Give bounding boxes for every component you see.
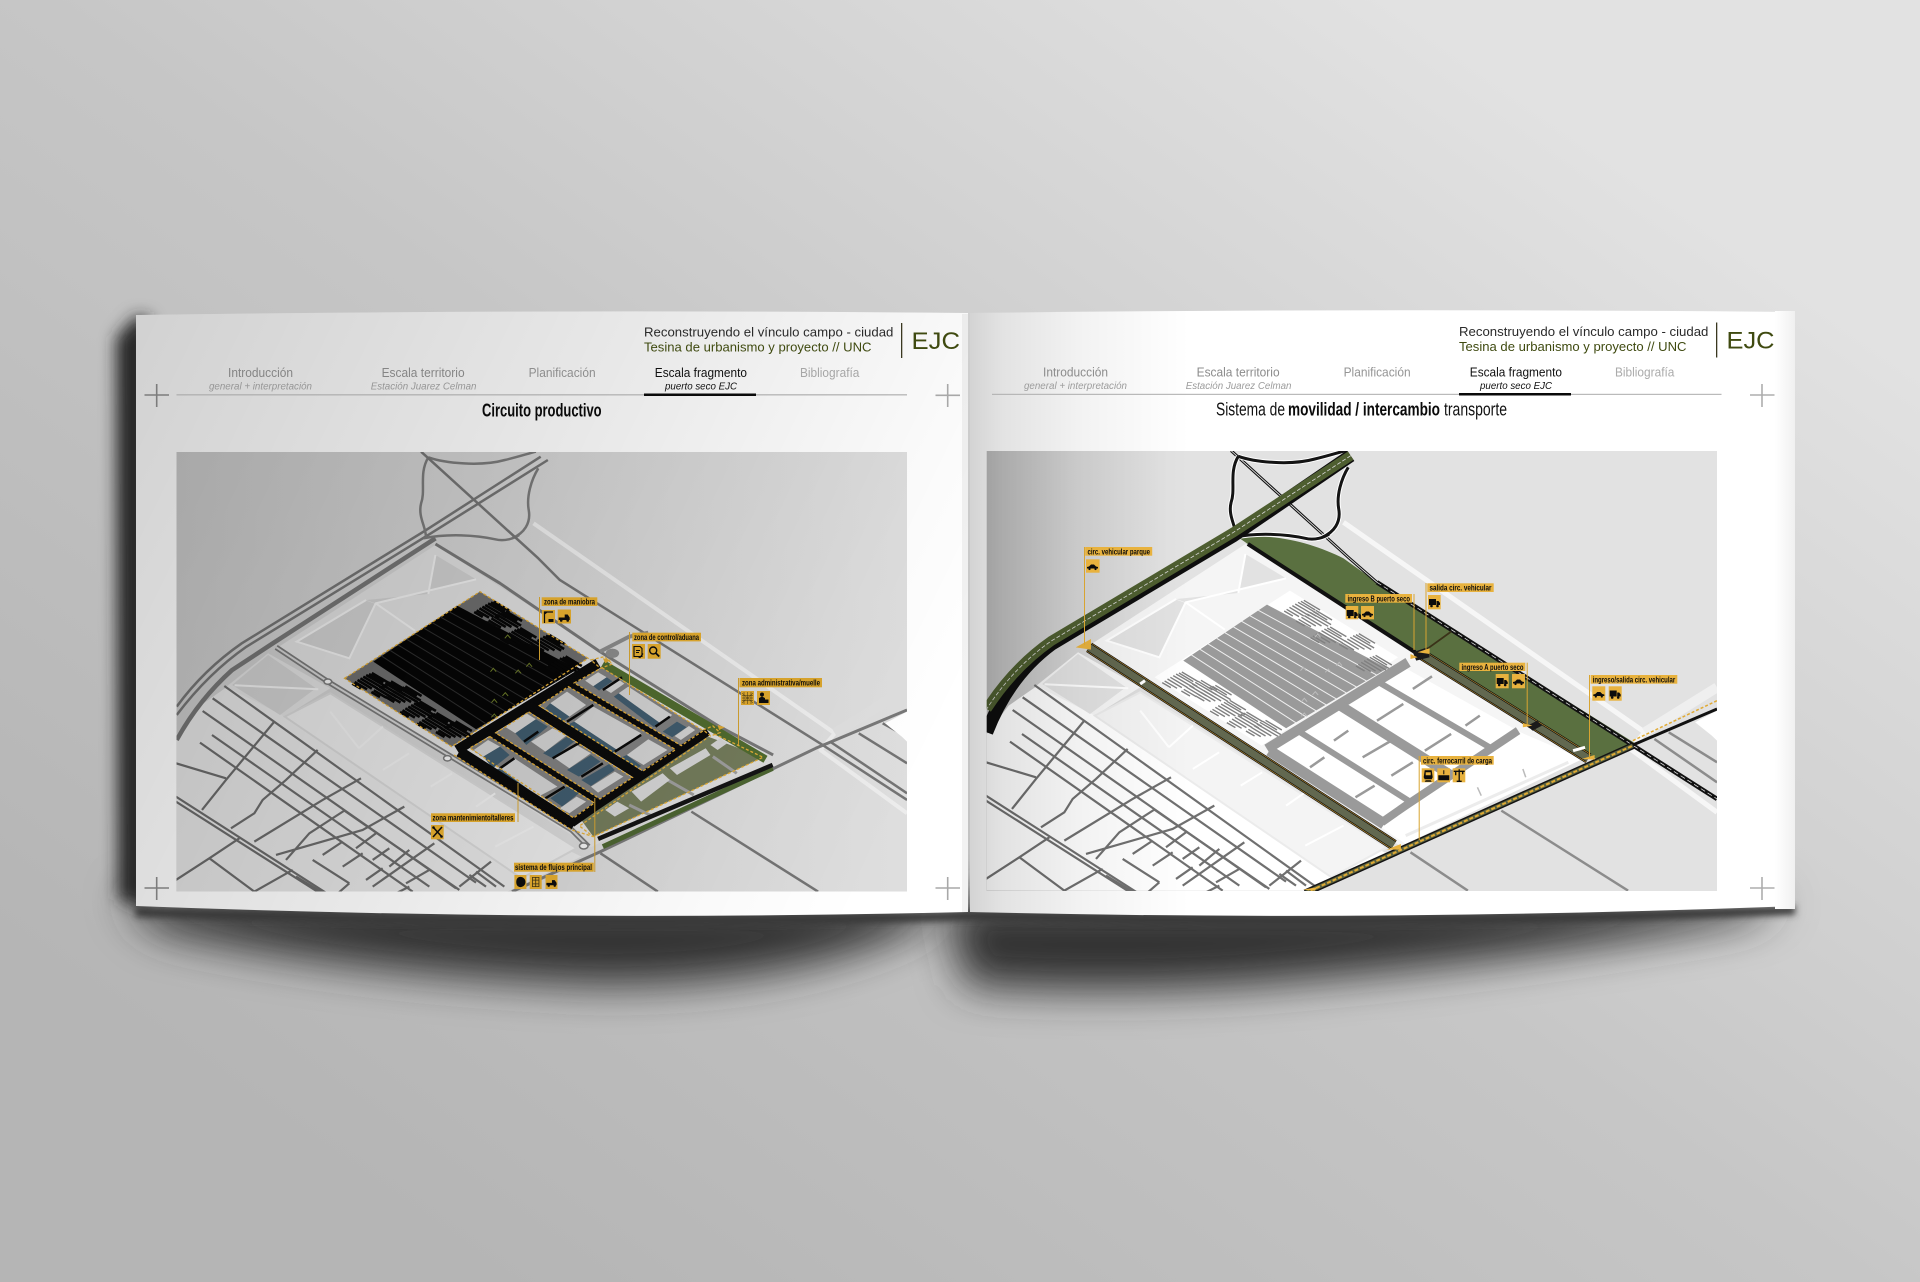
- icon: documento: [632, 644, 645, 659]
- divider: [1716, 322, 1717, 358]
- callout: sistema de flujos principal: [514, 798, 595, 889]
- icon: grúa: [542, 610, 555, 624]
- callout: zona de control/aduana: [629, 632, 701, 695]
- left page navigation: puerto seco EJC: [664, 382, 738, 392]
- callout: ingreso/salida circ. vehicular: ingreso/salida circ. vehicular: [1593, 674, 1676, 684]
- callout: zona de maniobra: [539, 597, 597, 660]
- icon: lupa: [648, 644, 661, 659]
- left page heading: Circuito productivo: [482, 400, 602, 421]
- icon: auto: [1592, 686, 1605, 701]
- callout: zona administrativa/muelle: zona administrativa/muelle: [742, 678, 820, 688]
- callout: circ. vehicular parque: [1084, 546, 1152, 645]
- callout: ingreso/salida circ. vehicular: [1589, 674, 1677, 758]
- callout: circ. ferrocarril de carga: circ. ferrocarril de carga: [1423, 755, 1492, 765]
- icon: carga: [546, 875, 558, 889]
- right page navigation: Escala territorio: [1197, 366, 1280, 380]
- site roads band: [1089, 647, 1394, 845]
- white site ground right: [1272, 666, 1583, 844]
- left page navigation: Bibliografía: [800, 366, 859, 380]
- icon: contenedor: [1437, 768, 1450, 782]
- right page navigation: Escala fragmento: [1470, 366, 1562, 380]
- right page navigation: Planificación: [1344, 366, 1411, 380]
- project title: [644, 325, 893, 355]
- callout: circ. vehicular parque: circ. vehicular parque: [1088, 546, 1150, 556]
- left page navigation: Introducción: [228, 366, 293, 380]
- left page crop marks: [144, 384, 960, 900]
- project title: Reconstruyendo el vínculo campo - ciudad: [1459, 324, 1708, 339]
- highway park: [987, 456, 1351, 732]
- icon: persona: [757, 691, 770, 705]
- left page navigation: Escala fragmento: [655, 366, 747, 380]
- roads left: [177, 452, 907, 892]
- right page navigation: Estación Juarez Celman: [1186, 381, 1292, 392]
- icon: plano: [530, 875, 542, 889]
- icon: camión: [1428, 595, 1441, 609]
- left page navigation: Escala territorio: [382, 366, 465, 380]
- project title: Reconstruyendo el vínculo campo - ciudad: [644, 325, 893, 340]
- callout: zona mantenimiento/talleres: zona mantenimiento/talleres: [432, 813, 514, 823]
- left page navigation: Planificación: [529, 366, 596, 380]
- callout: zona mantenimiento/talleres: [431, 783, 518, 839]
- icon: red: [741, 691, 754, 705]
- icon: camión: [1346, 606, 1358, 619]
- callout: ingreso B puerto seco: ingreso B puerto seco: [1348, 593, 1410, 603]
- callout: zona de maniobra: zona de maniobra: [544, 597, 595, 607]
- left page header: [644, 323, 960, 358]
- callout: circ. ferrocarril de carga: [1419, 755, 1494, 840]
- open book pages: [136, 310, 1795, 916]
- project title: Tesina de urbanismo y proyecto // UNC: [1459, 339, 1686, 354]
- callout: ingreso A puerto seco: [1459, 662, 1528, 725]
- icon: herramientas: [431, 825, 444, 839]
- callout: zona de control/aduana: zona de control/aduana: [634, 632, 699, 642]
- dashed zone outlines: [345, 592, 763, 837]
- right page heading: [1216, 400, 1507, 420]
- icon: auto: [1512, 674, 1525, 688]
- icon: engranaje: [514, 875, 526, 889]
- EJC logo: EJC: [1726, 328, 1774, 355]
- right page heading: Sistema de: [1216, 400, 1285, 420]
- right page navigation: general + interpretación: [1024, 381, 1127, 392]
- project title: Tesina de urbanismo y proyecto // UNC: [644, 340, 872, 355]
- left page navigation: [176, 366, 907, 396]
- icon: pórtico: [1453, 768, 1465, 782]
- icon: camión: [1609, 686, 1622, 701]
- right page heading: transporte: [1444, 400, 1507, 420]
- callout: sistema de flujos principal: sistema de flujos principal: [515, 862, 592, 872]
- right page navigation: Bibliografía: [1615, 366, 1674, 380]
- callout: salida circ. vehicular: [1426, 583, 1494, 650]
- right page header: [1459, 322, 1774, 358]
- EJC logo: EJC: [912, 328, 960, 355]
- south-east band: [1305, 746, 1633, 893]
- callout: ingreso A puerto seco: ingreso A puerto seco: [1462, 662, 1524, 672]
- left map: circuito productivo: [176, 451, 908, 895]
- left page navigation: general + interpretación: [209, 382, 312, 392]
- right page heading: movilidad / intercambio: [1288, 400, 1440, 420]
- right page navigation: [992, 366, 1722, 396]
- right page crop marks: [1750, 384, 1774, 900]
- left page navigation: Estación Juarez Celman: [371, 382, 477, 392]
- icon: auto: [1361, 606, 1374, 619]
- green park: [1238, 536, 1636, 759]
- icon: autoelevador: [558, 610, 571, 624]
- project title: [1459, 324, 1708, 354]
- right page navigation: puerto seco EJC: [1479, 381, 1553, 392]
- divider: [901, 323, 902, 358]
- page shading: [136, 310, 1795, 916]
- lawn: [581, 737, 763, 837]
- icon: tren: [1422, 768, 1434, 782]
- callout: ingreso B puerto seco: [1345, 593, 1414, 650]
- dark edges: [987, 451, 1717, 893]
- callout: zona administrativa/muelle: [738, 678, 822, 745]
- callouts right map: [1084, 546, 1677, 840]
- right map: movilidad e intercambio: [986, 450, 1718, 894]
- icon: camión: [1496, 674, 1509, 688]
- callouts left map: [431, 597, 822, 889]
- junction nodes: [1413, 647, 1430, 661]
- callout: salida circ. vehicular: salida circ. vehicular: [1430, 583, 1492, 593]
- icon: auto: [1086, 559, 1100, 573]
- right page navigation: Introducción: [1043, 366, 1108, 380]
- book shadow: [116, 316, 1795, 990]
